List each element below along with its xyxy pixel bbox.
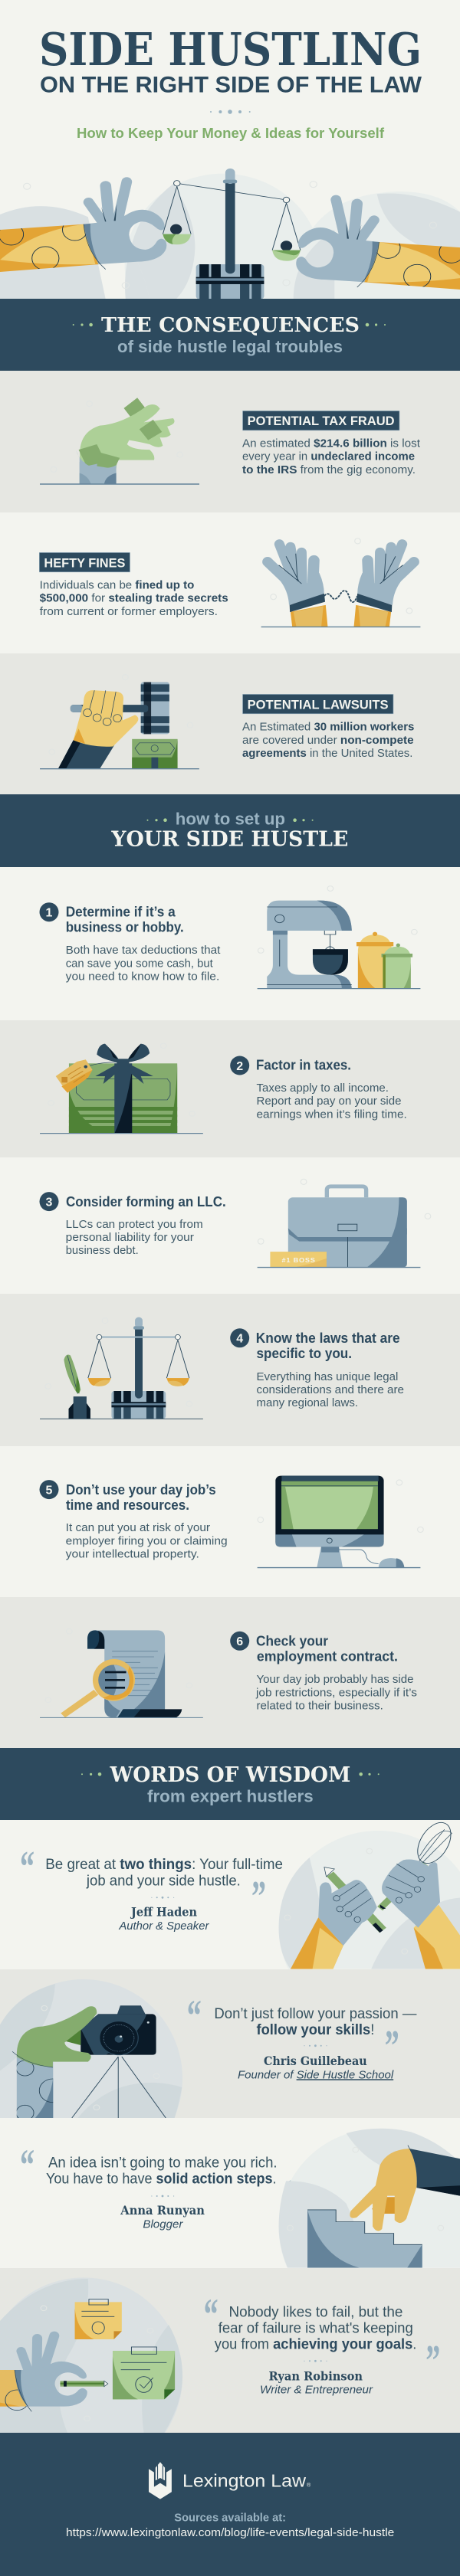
step 2 text: Taxes apply to all income. <box>256 1082 389 1095</box>
attribution: Jeff Haden <box>130 1905 197 1920</box>
attribution: Author & Speaker <box>118 1920 209 1933</box>
banner left dots <box>73 323 93 326</box>
step 5 heading: time and resources. <box>66 1497 189 1513</box>
step 4 heading: specific to you. <box>256 1346 352 1361</box>
illustration: briefcase with boss plaque: #1 BOSS <box>282 1256 316 1264</box>
closing quote mark: ” <box>287 2171 301 2221</box>
step 6 text: job restrictions, especially if it’s <box>255 1686 417 1699</box>
sources url: https://www.lexingtonlaw.com/blog/life-events/legal-side-hustle <box>66 2526 394 2539</box>
step 6 text: related to their business. <box>256 1700 383 1713</box>
banner: how to set up <box>0 794 460 867</box>
text: tax fraud body: An estimated $214.6 billion is lost <box>242 437 421 450</box>
label: potential tax fraud: POTENTIAL TAX FRAUD <box>248 414 395 428</box>
logo icon <box>149 2462 172 2499</box>
dots divider <box>151 1897 174 1899</box>
illustration: fingers walking up stairs <box>279 2128 460 2268</box>
panel: quote chris guillebeau <box>0 1969 460 2118</box>
banner heading: WORDS OF WISDOM <box>110 1763 350 1787</box>
dots divider <box>304 2044 327 2047</box>
step 3 text: personal liability for your <box>66 1231 194 1244</box>
closing quote mark: ” <box>251 1872 266 1922</box>
quote text <box>46 2155 278 2188</box>
step 2 text: Report and pay on your side <box>256 1095 402 1108</box>
quote text <box>45 1857 283 1889</box>
registered mark: ® <box>307 2483 311 2489</box>
label: hefty fines: HEFTY FINES <box>44 555 125 570</box>
step 1 text: Both have tax deductions that <box>66 944 221 957</box>
illustration: handcuffed hands <box>261 538 420 627</box>
banner: words of wisdom <box>0 1748 460 1820</box>
ground line <box>40 483 199 485</box>
illustration: stand mixer and jars <box>258 886 420 989</box>
number badge 2: 2 <box>236 1060 243 1073</box>
dots divider <box>210 110 251 114</box>
panel: potential tax fraud <box>0 371 460 512</box>
text: hefty fines body: from current or former employers. <box>40 605 218 618</box>
text: tax fraud body: to the IRS from the gig economy. <box>242 463 416 476</box>
panel: step 5 <box>0 1446 460 1597</box>
step 6 text <box>255 1673 417 1713</box>
step 1 heading: business or hobby. <box>66 920 184 935</box>
number badge 3: 3 <box>46 1196 53 1209</box>
text: tax fraud body: every year in undeclared income <box>242 450 415 463</box>
text: hefty fines body <box>40 579 228 618</box>
text: lawsuits body: are covered under non-compete <box>242 734 414 747</box>
step 1 text: you need to know how to file. <box>66 971 219 984</box>
step 1 heading <box>66 905 184 935</box>
panel: hefty fines <box>0 512 460 653</box>
step 1 text: can save you some cash, but <box>66 957 214 970</box>
number badge 5: 5 <box>46 1484 53 1497</box>
step 2 text <box>256 1082 407 1121</box>
step 6 heading: Check your <box>256 1634 328 1649</box>
attribution <box>118 1905 209 1933</box>
number badge 1 <box>40 902 58 921</box>
title: side hustling: SIDE HUSTLING <box>39 23 422 76</box>
quote text: Nobody likes to fail, but the <box>228 2304 402 2320</box>
text: hefty fines body: Individuals can be fined up to <box>40 579 194 592</box>
closing quote mark: ” <box>426 2336 440 2386</box>
attribution: Ryan Robinson <box>268 2368 363 2383</box>
text: lawsuits body: An Estimated 30 million workers <box>242 721 414 734</box>
quote text: Don’t just follow your passion — <box>214 2006 416 2022</box>
panel: step 2 <box>0 1020 460 1157</box>
illustration: hand with camera on tripod <box>0 1979 182 2118</box>
banner dots <box>81 1772 380 1776</box>
panel: quote jeff haden <box>21 1822 460 1969</box>
step 6 text: Your day job probably has side <box>256 1673 414 1686</box>
attribution: Chris Guillebeau <box>264 2054 367 2068</box>
text: hefty fines body: $500,000 for stealing trade secrets <box>40 592 228 605</box>
panel: step 3 <box>0 1157 460 1294</box>
number badge 5 <box>40 1480 58 1499</box>
number badge 6 <box>230 1632 249 1651</box>
step 4 text <box>256 1370 404 1409</box>
banner heading: YOUR SIDE HUSTLE <box>110 828 348 852</box>
opening quote mark: “ <box>187 1991 202 2041</box>
illustration: briefcase with boss plaque <box>258 1179 431 1268</box>
step 6 heading <box>256 1634 398 1664</box>
quote text: follow your skills! <box>256 2022 374 2038</box>
step 1 heading: Determine if it’s a <box>66 905 176 920</box>
quote text: job and your side hustle. <box>86 1873 241 1889</box>
banner heading: THE CONSEQUENCES <box>101 314 360 337</box>
number badge 4 <box>230 1328 249 1347</box>
step 4 heading: Know the laws that are <box>256 1331 400 1346</box>
banner dots <box>147 818 314 822</box>
step 3 heading: Consider forming an LLC. <box>66 1194 226 1209</box>
logo wordmark: Lexington Law <box>182 2471 306 2491</box>
opening quote mark: “ <box>20 1841 34 1891</box>
panel: potential lawsuits <box>0 653 460 794</box>
panel: step 6 <box>0 1597 460 1748</box>
step 2 text: earnings when it’s filing time. <box>256 1108 407 1121</box>
attribution <box>238 2054 394 2081</box>
attribution: Blogger <box>143 2218 183 2231</box>
closing quote mark: ” <box>385 2021 399 2071</box>
number badge 3 <box>40 1192 58 1211</box>
number badge 2 <box>230 1056 249 1075</box>
panel: hero header <box>0 32 460 299</box>
banner right dots <box>366 323 386 326</box>
number badge 4: 4 <box>236 1333 243 1346</box>
step 3 text <box>66 1218 203 1257</box>
sources label: Sources available at: <box>174 2512 286 2525</box>
illustration: desktop computer <box>258 1476 423 1568</box>
quote text: Be great at two things: Your full-time <box>45 1857 283 1873</box>
subtitle: How to Keep Your Money & Ideas for Yourself <box>77 125 385 141</box>
title: second line: ON THE RIGHT SIDE OF THE LAW <box>40 72 422 98</box>
banner subheading: from expert hustlers <box>147 1786 314 1805</box>
quote text: You have to have solid action steps. <box>46 2172 276 2188</box>
quote text: An idea isn’t going to make you rich. <box>48 2155 278 2171</box>
quote text: you from achieving your goals. <box>215 2337 416 2353</box>
number badge 6: 6 <box>236 1635 243 1648</box>
step 4 text: many regional laws. <box>256 1396 358 1409</box>
step 1 text <box>66 944 221 984</box>
step 5 text: It can put you at risk of your <box>66 1521 210 1534</box>
label: hefty fines <box>39 552 130 572</box>
panel: step 4 <box>0 1294 460 1446</box>
dots divider <box>151 2195 174 2197</box>
quote text <box>215 2304 416 2353</box>
illustration: hands with pencil and whisk <box>279 1822 460 1969</box>
banner: the consequences <box>0 299 460 371</box>
panel: step 1 <box>0 867 460 1020</box>
step 4 heading <box>256 1331 400 1361</box>
illustration: cash gift with tag <box>40 1043 203 1134</box>
dots divider <box>304 2360 327 2362</box>
quote text <box>214 2006 416 2038</box>
illustration: hand with cash in pocket <box>51 398 182 484</box>
step 5 heading: Don’t use your day job’s <box>66 1482 216 1497</box>
attribution: Writer & Entrepreneur <box>260 2383 373 2396</box>
number badge 1: 1 <box>46 907 53 919</box>
illustration: balanced scale and quill <box>40 1317 203 1419</box>
step 3 text: LLCs can protect you from <box>66 1218 203 1231</box>
illustration: hands weighing scale <box>0 169 460 299</box>
attribution: Founder of Side Hustle School <box>238 2068 394 2081</box>
opening quote mark: “ <box>20 2140 34 2190</box>
step 5 text: employer firing you or claiming <box>66 1534 228 1547</box>
step 5 text: your intellectual property. <box>66 1548 199 1561</box>
illustration: contract with magnifying glass <box>40 1628 203 1717</box>
opening quote mark: “ <box>204 2290 219 2339</box>
attribution <box>260 2368 373 2396</box>
step 2 heading: Factor in taxes. <box>256 1058 351 1073</box>
banner subheading: of side hustle legal troubles <box>117 337 343 356</box>
illustration: hand with pencil and sticky notes <box>0 2278 182 2433</box>
illustration: gavel in hand with money stack <box>40 675 199 769</box>
banner subheading: how to set up <box>176 810 285 829</box>
step 3 text: business debt. <box>66 1244 139 1257</box>
label: potential lawsuits: POTENTIAL LAWSUITS <box>248 697 389 712</box>
panel: quote anna runyan <box>21 2128 460 2268</box>
attribution: Anna Runyan <box>120 2203 205 2218</box>
text: lawsuits body <box>242 721 414 760</box>
step 5 text <box>66 1521 228 1561</box>
quote text: fear of failure is what's keeping <box>219 2320 413 2336</box>
panel: footer <box>0 2433 460 2576</box>
step 4 text: Everything has unique legal <box>256 1370 398 1383</box>
attribution <box>120 2203 205 2231</box>
panel: quote ryan robinson <box>0 2268 460 2433</box>
step 5 heading <box>66 1482 216 1513</box>
text: lawsuits body: agreements in the United States. <box>242 747 412 760</box>
step 4 text: considerations and there are <box>256 1383 404 1396</box>
text: tax fraud body <box>242 437 421 476</box>
step 6 heading: employment contract. <box>257 1649 398 1664</box>
